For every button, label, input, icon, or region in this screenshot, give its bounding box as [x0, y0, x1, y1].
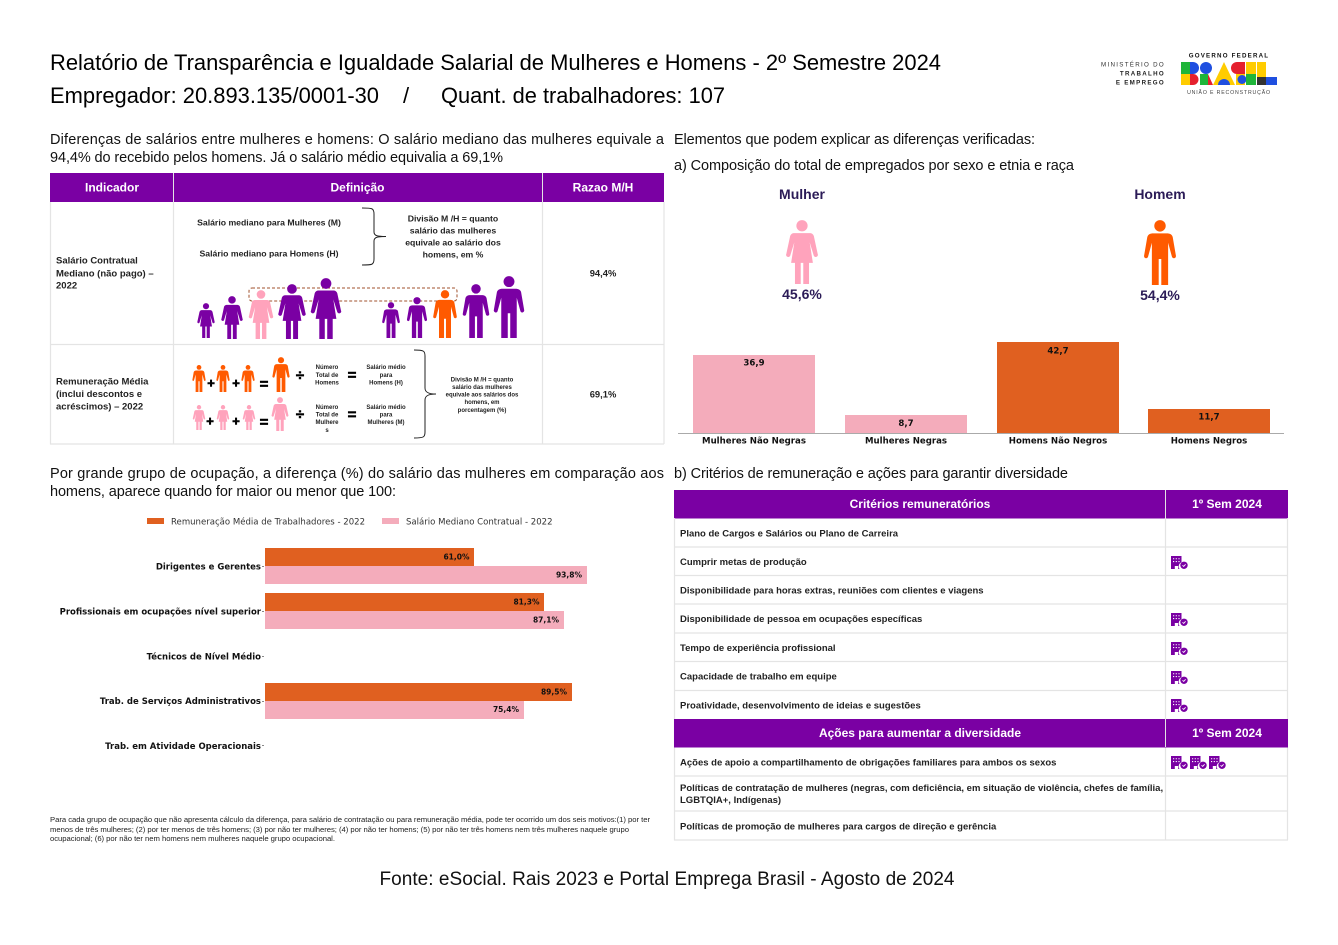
table header: critérios — [674, 490, 1288, 518]
logo: ministério e governo federal: UNIÃO E RECONSTRUÇÃO — [1187, 89, 1271, 96]
formula: remuneração média — [192, 350, 519, 438]
row label: salário contratual — [56, 256, 154, 292]
formula: remuneração média: ÷ — [296, 406, 304, 423]
bar chart: diferença por ocupação: 93,8% — [556, 570, 582, 580]
row label: remuneração média — [56, 376, 149, 412]
formula: salário mediano: salário das mulheres — [410, 226, 496, 236]
panel: critérios remuneratórios: Cumprir metas de produção — [680, 557, 807, 568]
row label: salário contratual: 2022 — [56, 280, 77, 292]
formula: remuneração média: porcentagem (%) — [458, 408, 506, 414]
row label: remuneração média: (inclui descontos e — [56, 389, 142, 400]
bar chart: diferença por ocupação: Trab. em Atividade Operacionais — [105, 742, 261, 752]
formula: remuneração média: = — [348, 406, 357, 424]
source note: Fonte: eSocial. Rais 2023 e Portal Emprega Brasil - Agosto de 2024 — [380, 869, 955, 890]
text block: diferenças de salários: 94,4% do recebido pelos homens. Já o salário médio equivalia a 69,1% — [50, 150, 503, 166]
bar chart: diferença por ocupação: Profissionais em ocupações nível superior — [60, 608, 262, 618]
panel: ações para diversidade — [674, 719, 1288, 832]
bar chart: diferença por ocupação: Dirigentes e Gerentes — [156, 562, 261, 572]
formula: remuneração média: = — [260, 414, 269, 431]
bar chart: diferença por ocupação — [60, 548, 587, 752]
text block: diferenças de salários: Diferenças de salários entre mulheres e homens: O salário mediano das mulheres equivale a — [50, 132, 665, 148]
text block: grande grupo de ocupação: homens, aparece quando for maior ou menor que 100: — [50, 484, 396, 500]
text block: diferenças de salários — [50, 132, 665, 166]
footnote: ocupacional; (6) por não ter nem homens nem mulheres naquele grupo ocupacional. — [50, 834, 335, 843]
row value: 94,4%: 94,4% — [590, 268, 617, 278]
bar chart: composição por sexo e raça: Mulheres Não Negras — [702, 436, 806, 446]
bar chart: composição por sexo e raça: 11,7 — [1198, 412, 1220, 422]
formula: remuneração média: = — [260, 376, 269, 393]
formula: remuneração média: Homens (H) — [369, 380, 403, 386]
formula: remuneração média: + — [232, 376, 240, 390]
panel: homem: 54,4% — [1140, 287, 1180, 303]
bar chart: composição por sexo e raça: 8,7 — [898, 419, 914, 429]
table header: critérios: 1º Sem 2024 — [1192, 497, 1262, 511]
formula: remuneração média: salário das mulheres — [452, 385, 513, 391]
title: Relatório de Transparência e Igualdade Salarial de Mulheres e Homens - 2º Semestre 2024 — [50, 50, 941, 75]
bar chart: composição por sexo e raça: 36,9 — [743, 358, 765, 368]
legend — [147, 516, 553, 528]
text block: grande grupo de ocupação: Por grande grupo de ocupação, a diferença (%) do salário das mulheres em comparação aos — [50, 466, 664, 482]
formula: remuneração média: + — [207, 376, 215, 390]
formula: salário mediano: Salário mediano para Homens (H) — [199, 248, 339, 258]
row value: 69,1%: 69,1% — [590, 388, 617, 400]
bar chart: diferença por ocupação: 81,3% — [513, 598, 540, 606]
icons: empresa com verificação — [1171, 756, 1226, 769]
formula: remuneração média: Número — [316, 365, 339, 371]
title — [50, 50, 941, 108]
formula: remuneração média: = — [348, 367, 357, 384]
panel: homem: Homem — [1134, 186, 1186, 202]
formula: remuneração média: Mulhere — [315, 420, 339, 426]
table header: ações: Ações para aumentar a diversidade — [819, 726, 1021, 740]
legend: Remuneração Média de Trabalhadores - 2022 — [171, 516, 365, 528]
icon: homem — [1144, 220, 1176, 285]
table header: ações: 1º Sem 2024 — [1192, 726, 1262, 740]
bar chart: diferença por ocupação: 89,5% — [541, 688, 567, 696]
text block: elementos explicativos: Elementos que podem explicar as diferenças verificadas: — [674, 132, 1035, 148]
panel: homem — [1134, 186, 1186, 303]
logo: ministério e governo federal: GOVERNO FEDERAL — [1189, 52, 1269, 60]
text block: grande grupo de ocupação — [50, 466, 664, 500]
formula: remuneração média: Número — [316, 405, 339, 411]
formula: remuneração média: homens, em — [464, 400, 500, 406]
bar chart: diferença por ocupação: Trab. de Serviços Administrativos — [100, 697, 261, 707]
formula: remuneração média: Salário médio — [366, 365, 406, 371]
table header: Razao M/H — [573, 180, 633, 194]
bar chart: diferença por ocupação: 75,4% — [493, 705, 519, 714]
formula: remuneração média: equivale aos salários dos — [446, 392, 519, 398]
table header — [50, 173, 664, 202]
formula: remuneração média: Total de — [316, 412, 339, 418]
table header: Definição — [330, 180, 385, 194]
footnote — [50, 815, 650, 843]
panel: critérios remuneratórios: Capacidade de trabalho em equipe — [680, 672, 837, 682]
title: Empregador: 20.893.135/0001-30 — [50, 83, 379, 108]
bar chart: composição por sexo e raça: Mulheres Negras — [865, 436, 947, 446]
formula: remuneração média: s — [325, 428, 329, 434]
text block: elementos explicativos: a) Composição do total de empregados por sexo e etnia e raça — [674, 158, 1075, 174]
formula: remuneração média: ÷ — [296, 367, 304, 384]
formula: remuneração média: Salário médio — [366, 405, 406, 411]
table header: critérios: Critérios remuneratórios — [850, 497, 991, 511]
table header: ações — [674, 719, 1288, 748]
text block: critérios heading: b) Critérios de remuneração e ações para garantir diversidade — [674, 466, 1068, 482]
bar chart: composição por sexo e raça: 42,7 — [1047, 346, 1069, 356]
title: / — [403, 83, 410, 108]
formula: salário mediano: Salário mediano para Mulheres (M) — [197, 218, 341, 228]
formula: remuneração média: Homens — [315, 380, 339, 386]
row label: remuneração média: Remuneração Média — [56, 376, 149, 388]
panel: mulher: 45,6% — [782, 286, 822, 302]
formula: salário mediano: homens, em % — [423, 250, 484, 260]
bar chart: diferença por ocupação: Técnicos de Nível Médio — [147, 652, 261, 662]
footnote: Para cada grupo de ocupação que não apresenta cálculo da diferença, para salário de contratação ou para remuneração média, pode ter ocorrido um dos seis motivos:(1) por ter — [50, 815, 650, 824]
logo: ministério e governo federal: E EMPREGO — [1116, 80, 1165, 86]
panel: critérios remuneratórios: Plano de Cargos e Salários ou Plano de Carreira — [680, 528, 899, 540]
title: Quant. de trabalhadores: 107 — [441, 83, 725, 108]
formula: remuneração média: Total de — [316, 373, 339, 379]
logo: ministério e governo federal — [1101, 52, 1277, 96]
panel: ações para diversidade: Políticas de contratação de mulheres (negras, com deficiência, em situação de violência, chefes de família, — [680, 783, 1163, 794]
icons: empresa com verificação — [1171, 556, 1188, 712]
legend: Salário Mediano Contratual - 2022 — [406, 518, 553, 528]
row label: remuneração média: acréscimos) – 2022 — [56, 402, 143, 412]
formula: remuneração média: + — [232, 414, 240, 428]
row label: salário contratual: Mediano (não pago) – — [56, 268, 154, 280]
formula: salário mediano: Divisão M /H = quanto — [408, 214, 498, 224]
text block: elementos explicativos — [674, 132, 1075, 174]
footnote: menos de três mulheres; (2) por ter menos de três homens; (3) por não ter mulheres; (4) por não ter homens; (5) por não ter três homens nem três mulheres naquele grupo — [50, 825, 629, 834]
formula: remuneração média: para — [380, 373, 393, 379]
panel: ações para diversidade: LGBTQIA+, Indígenas) — [680, 795, 781, 806]
formula: salário mediano — [197, 208, 501, 265]
panel: critérios remuneratórios: Tempo de experiência profissional — [680, 643, 836, 654]
formula: remuneração média: para — [380, 412, 393, 418]
bar chart: diferença por ocupação: 87,1% — [533, 616, 559, 624]
panel: critérios remuneratórios: Disponibilidade de pessoa em ocupações específicas — [680, 614, 922, 625]
panel: ações para diversidade: Ações de apoio a compartilhamento de obrigações familiares para ambos os sexos — [680, 758, 1056, 768]
panel: ações para diversidade: Políticas de promoção de mulheres para cargos de direção e gerência — [680, 822, 997, 832]
panel: mulher: Mulher — [779, 186, 825, 202]
row label: salário contratual: Salário Contratual — [56, 256, 138, 266]
panel: tabela de indicadores — [50, 173, 664, 444]
logo: ministério e governo federal: TRABALHO — [1120, 70, 1165, 78]
bar chart: composição por sexo e raça: Homens Não Negros — [1009, 436, 1107, 446]
bar chart: diferença por ocupação: 61,0% — [443, 552, 470, 562]
bar chart: composição por sexo e raça — [678, 342, 1284, 446]
icon: mulher — [786, 220, 818, 284]
panel: critérios remuneratórios: Disponibilidade para horas extras, reuniões com clientes e viagens — [680, 586, 984, 596]
icons: pessoas ordenadas por salário — [197, 276, 524, 339]
logo: ministério e governo federal: MINISTÉRIO DO — [1101, 62, 1165, 68]
panel: critérios remuneratórios — [674, 490, 1288, 840]
formula: remuneração média: Mulheres (M) — [367, 420, 405, 426]
bar chart: composição por sexo e raça: Homens Negros — [1171, 436, 1247, 446]
panel: mulher — [779, 186, 825, 302]
formula: salário mediano: equivale ao salário dos — [405, 238, 501, 248]
formula: remuneração média: + — [206, 414, 214, 428]
table header: Indicador — [85, 180, 139, 194]
formula: remuneração média: Divisão M /H = quanto — [451, 378, 514, 384]
panel: critérios remuneratórios: Proatividade, desenvolvimento de ideias e sugestões — [680, 700, 921, 712]
